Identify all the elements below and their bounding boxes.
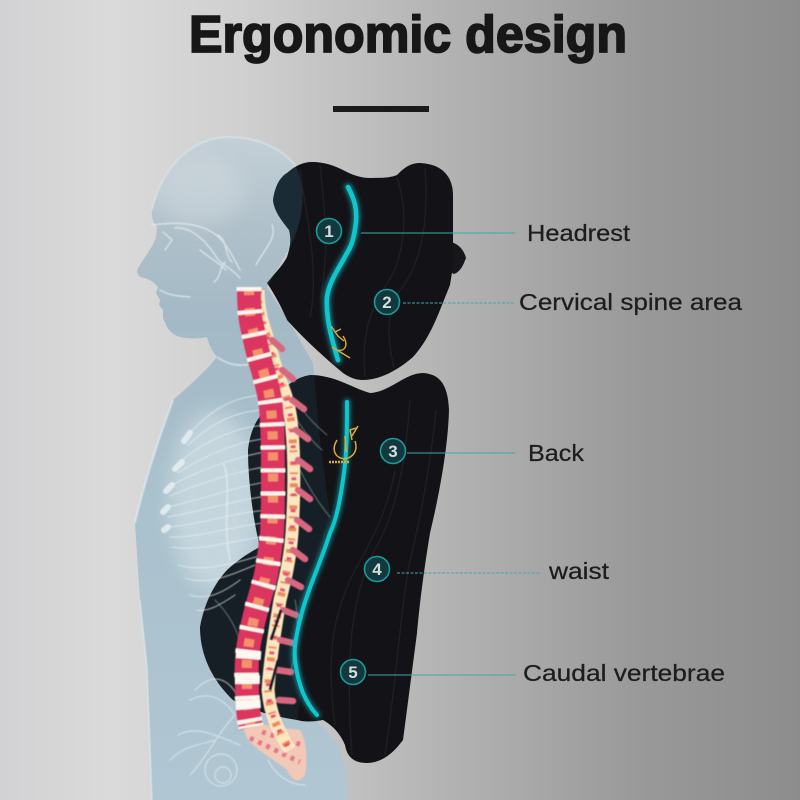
callout 2: cervical spine area: Cervical spine area — [519, 289, 742, 315]
skeleton: skull vessels, ribs and pelvis — [152, 223, 330, 786]
callout 4: waist — [364, 556, 610, 584]
spinous processes — [272, 340, 310, 701]
lower pillow: back and waist cushion — [200, 373, 449, 763]
title underline — [333, 106, 429, 112]
human body figure — [135, 137, 347, 800]
callout 5: caudal vertebrae — [340, 660, 725, 686]
callout 5: caudal vertebrae: 5 — [348, 663, 358, 682]
sacrum — [238, 715, 306, 780]
cyan curve: lower pillow — [295, 402, 347, 715]
icon: gold logo on headrest — [331, 326, 350, 358]
icon: gold logo on back cushion — [329, 426, 358, 462]
callout 4: waist: waist — [548, 558, 610, 584]
callout 1: headrest — [316, 218, 631, 246]
vertebral bodies — [247, 287, 273, 727]
callout 1: headrest: 1 — [324, 222, 334, 241]
callout 2: cervical spine area — [374, 289, 742, 315]
cream column — [258, 290, 294, 750]
upper pillow: headrest — [267, 162, 466, 380]
title: Ergonomic design — [189, 6, 627, 64]
callout 5: caudal vertebrae: Caudal vertebrae — [523, 660, 725, 686]
callout 1: headrest: Headrest — [527, 220, 631, 246]
body tint over pillows — [200, 166, 330, 720]
callout 3: back — [380, 438, 585, 466]
cyan curve: headrest — [327, 187, 356, 360]
callout 3: back: Back — [528, 440, 585, 466]
callout 2: cervical spine area: 2 — [382, 293, 392, 312]
callout 4: waist: 4 — [372, 560, 382, 579]
spine — [238, 287, 310, 780]
callout 3: back: 3 — [388, 442, 398, 461]
